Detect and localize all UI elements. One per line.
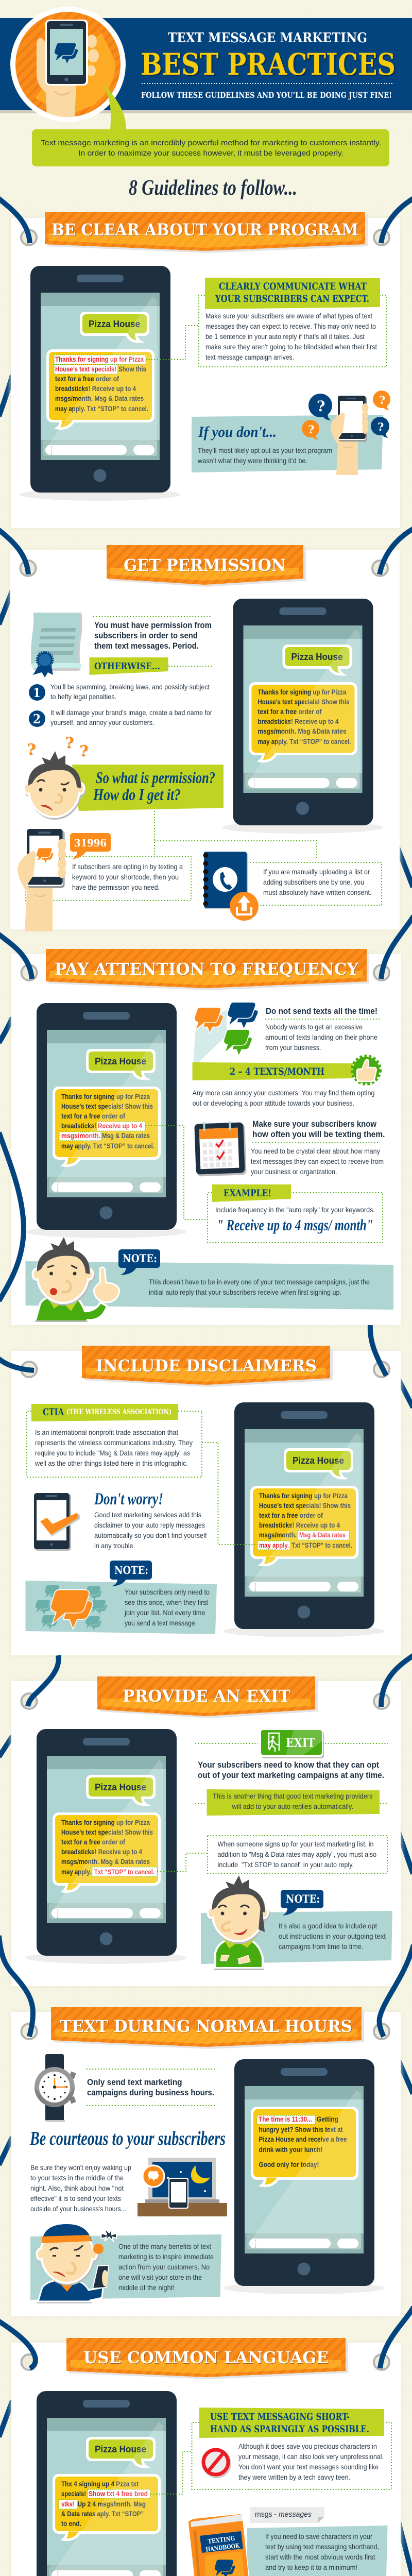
statement: opt out at any time: out of your text marketing campaigns at any time. (198, 1771, 384, 1780)
phone: pizza house message: msgs/month. Msg & Data rates (55, 395, 144, 402)
text: unprofessional (238, 2442, 384, 2481)
note panel: campaigns from time to time. (279, 1942, 364, 1951)
note panel: you send a text message. (125, 1619, 197, 1627)
phone: exit highlight: Txt “STOP” to cancel. (94, 1868, 154, 1876)
text: don't worry: Good text marketing services add this (94, 1511, 201, 1519)
phone: exit highlight: Thanks for signing up for Pizza (61, 1819, 150, 1826)
section 4: include disclaimers (0, 1325, 401, 1655)
phone: frequency highlight: Msg & Data rates (102, 1132, 150, 1140)
panel: save characters: If you need to save characters in your (265, 2532, 372, 2540)
label: otherwise (90, 657, 168, 675)
icon: texting handbook: HANDBOOK (205, 2542, 240, 2553)
banner: text during normal hours (51, 2007, 364, 2049)
text: don't worry: disclaimer to your auto reply messages (94, 1521, 205, 1529)
banner: pay attention to frequency (46, 949, 369, 990)
note panel: Your subscribers only need to (125, 1588, 210, 1596)
phone: frequency highlight: Receive up to 4 (98, 1122, 142, 1130)
text: manually uploading: must absolutely have written consent. (263, 888, 372, 896)
numbered point 1 (29, 683, 210, 701)
text: clearly communicate: text message campaign arrives. (205, 353, 294, 361)
phone: exit highlight: House’s text specials! Show this (61, 1828, 153, 1836)
text: unprofessional: Although it does save you precious characters in (238, 2442, 377, 2450)
text: clearly communicate: be 1 sentence in your auto reply if that’s all it takes. Just (205, 332, 365, 341)
phone: lunch message: hungry yet? Show this text at (259, 2126, 343, 2133)
text: don't worry: automatically so you don't find yourself (94, 1531, 207, 1539)
panel: save characters (247, 2526, 387, 2576)
phone: exit highlight (26, 1729, 186, 1964)
numbered point 2: yourself, and annoy your customers. (50, 718, 154, 726)
panel: inspire immediate action: middle of the night! (118, 2283, 175, 2292)
panel: if you don't: wasn’t what they were thinking it’d be. (197, 456, 307, 465)
box: when someone signs up: include "Txt STOP to cancel" in your auto reply. (217, 1860, 354, 1869)
phone: disclaimer highlight: msgs/month. (259, 1531, 297, 1539)
banner: text during normal hours: TEXT DURING NORMAL HOURS (60, 2016, 352, 2036)
banner: provide an exit (97, 1676, 318, 1718)
text: opting in (72, 862, 183, 891)
phone: pizza house message: text for a free order of (258, 708, 322, 716)
icon: hand with phone (18, 828, 66, 931)
text: ctia description: require you to include "Msg & Data rates may apply" as (35, 1449, 190, 1457)
phone: pizza house message (20, 266, 180, 501)
phone: frequency highlight: text for a free order of (61, 1112, 125, 1120)
icon: hand holding phone with question bubbles (302, 391, 390, 475)
phone: frequency highlight: breadsticks! (61, 1122, 96, 1130)
icon: texting handbook (188, 2514, 250, 2576)
box: example: Include frequency in the "auto reply" for your keywords. (215, 1206, 375, 1214)
panel: inspire immediate action: marketing is to inspire immediate (118, 2252, 214, 2261)
character: confused man: ? (27, 741, 36, 759)
box: when someone signs up (208, 1836, 387, 1873)
phone: shorthand message: Up 2 4 msgs/mnth. Msg (77, 2500, 146, 2508)
panel: if you don't (192, 415, 383, 472)
numbered point 1: 1 (33, 685, 41, 700)
box: ctia (31, 1404, 178, 1421)
statement: business hours: campaigns during business hours. (87, 2088, 214, 2097)
bar: 2-4 texts per month: 2 – 4 TEXTS/MONTH (230, 1066, 324, 1077)
banner: include disclaimers (82, 1346, 333, 1387)
label: otherwise: OTHERWISE... (94, 661, 160, 672)
note panel: see this once, when they first (125, 1598, 208, 1606)
phone: frequency highlight (26, 1003, 186, 1238)
text: ctia description: well as the other things listed here in this infographic. (35, 1459, 188, 1467)
banner: be clear about your program: BE CLEAR ABOUT YOUR PROGRAM (52, 220, 358, 240)
box: good providers add automatically (207, 1789, 380, 1816)
box: when someone signs up: addition to "Msg & Data rates may apply", you must also (217, 1850, 376, 1858)
phone: disclaimer highlight (224, 1402, 384, 1637)
section 1: be clear about your program (0, 198, 412, 528)
panel: so what is permission (72, 765, 224, 811)
box: good providers add automatically: This is another thing that good text marketing providers (213, 1792, 373, 1800)
text: make sure subscribers know (251, 1120, 385, 1176)
text: any more can annoy (193, 1089, 375, 1107)
phone: frequency highlight: msgs/month. (61, 1132, 100, 1140)
statement: opt out at any time (198, 1760, 384, 1780)
text: opting in: If subscribers are opting in by texting a (72, 862, 183, 871)
text: clearly communicate: make sure they aren’t going to be blindsided when their first (205, 343, 377, 351)
panel: save characters: start with the most obvious words first (265, 2553, 375, 2561)
panel: inspire immediate action: action from your customers. No (118, 2263, 210, 2271)
text: opting in: keyword to your shortcode, then you (72, 873, 179, 881)
statement: business hours (87, 2078, 214, 2097)
phone: frequency highlight: may apply. Txt “STOP” to cancel. (61, 1142, 154, 1150)
phone: pizza house message: Thanks for signing up for Pizza (258, 688, 347, 696)
text: make sure subscribers know: You need to be crystal clear about how many (251, 1147, 380, 1155)
intro callout (32, 81, 389, 166)
phone: disclaimer highlight: Msg & Data rates (299, 1531, 346, 1539)
phone: exit highlight: Pizza House (95, 1782, 146, 1792)
hero illustration: hand holding phone (10, 7, 126, 122)
phone: pizza house message: House’s text specials! Show this (258, 698, 349, 706)
text: don't worry (94, 1490, 207, 1550)
icon: hand holding phone with question bubbles: ? (377, 420, 384, 433)
icon: hand holding phone with question bubbles: ? (317, 398, 325, 415)
text: do not send all the time: from your business. (265, 1043, 321, 1052)
phone: exit highlight: text for a free order of (61, 1838, 125, 1846)
note panel: This doesn’t have to be in every one of your text message campaigns, just the (149, 1278, 370, 1286)
phone: disclaimer highlight: House’s text specials! Show this (259, 1502, 351, 1510)
banner: use common language (66, 2338, 348, 2379)
phone: disclaimer highlight: Pizza House (293, 1455, 344, 1466)
banner: get permission: GET PERMISSION (124, 555, 286, 575)
statement: you must have permission: subscribers in order to send (94, 631, 198, 640)
guidelines heading: 8 Guidelines to follow... (129, 176, 297, 200)
phone: disclaimer highlight: text for a free order of (259, 1512, 323, 1519)
statement: business hours: Only send text marketing (87, 2078, 182, 2087)
text: waking up: outside of your business's hours... (30, 2205, 126, 2213)
phone: pizza house message: breadsticks! Receive up to 4 (55, 385, 136, 393)
numbered point 2: It will damage your brand’s image, create a bad name for (50, 708, 212, 717)
bubble: note (118, 1249, 160, 1275)
phone: disclaimer highlight: breadsticks! Receive up to 4 (259, 1521, 340, 1529)
phone: pizza house message: breadsticks! Receive up to 4 (258, 718, 339, 725)
heading box: shorthand: USE TEXT MESSAGING SHORT- (210, 2411, 350, 2422)
intro callout: In order to maximize your success however, it must be leveraged properly. (78, 149, 344, 158)
text: ctia description (35, 1428, 193, 1467)
text: do not send all the time: Do not send texts all the time! (266, 1007, 377, 1016)
note panel (201, 1890, 392, 1964)
title line 1: TEXT MESSAGE MARKETING (168, 30, 367, 46)
box: example: EXAMPLE! (224, 1188, 271, 1199)
icon: phone with check mark (34, 1493, 80, 1551)
section 7: use common language (0, 2307, 412, 2576)
phone: frequency highlight: Pizza House (95, 1056, 146, 1066)
text: manually uploading (263, 868, 372, 896)
phone: pizza house message (222, 599, 383, 834)
banner: use common language: USE COMMON LANGUAGE (83, 2348, 329, 2367)
icon: thumbs up badge (353, 1057, 380, 1083)
phone: shorthand message: specials! (61, 2490, 86, 2498)
statement: you must have permission: them text messages. Period. (94, 641, 199, 651)
icon: night window with phone (138, 2158, 227, 2216)
banner: get permission (107, 545, 306, 587)
text: ctia description: represents the wireless communications industry. They (35, 1438, 193, 1447)
note panel: NOTE: (114, 1564, 148, 1577)
phone: shorthand message: Pizza House (95, 2444, 146, 2454)
section 6: text during normal hours (0, 1936, 412, 2316)
phone: exit highlight: msgs/month. Msg & Data rates (61, 1858, 150, 1866)
card: msgs (250, 2507, 324, 2523)
note panel: initial auto reply that your subscribers receive when first signing up. (149, 1288, 341, 1296)
text: clearly communicate: messages they can expect to receive. This may only need to (205, 322, 376, 330)
box: when someone signs up: When someone signs up for your text marketing list, in (217, 1840, 374, 1848)
phone: lunch message: drink with your lunch! (259, 2146, 322, 2154)
note panel (26, 1261, 393, 1310)
panel: so what is permission: How do I get it? (93, 785, 181, 804)
box: good providers add automatically: will add to your auto replies automatically. (232, 1802, 353, 1810)
note panel: It’s also a good idea to include opt (279, 1922, 377, 1930)
bubble: note: NOTE: (123, 1252, 157, 1265)
text: do not send all the time: amount of texts landing on their phone (265, 1033, 377, 1041)
panel: if you don't: They’ll most likely opt out as your text program (198, 446, 332, 454)
heading box: shorthand (199, 2408, 384, 2438)
intro callout: Text message marketing is an incredibly powerful method for marketing to customers instantly. (41, 139, 381, 147)
icon: wristwatch (35, 2054, 76, 2122)
statement: you must have permission (94, 621, 212, 651)
phone: exit highlight: may apply. (61, 1868, 91, 1876)
phone: shorthand message: & Data rates aply. Txt “STOP” (61, 2510, 144, 2518)
banner: pay attention to frequency: PAY ATTENTION TO FREQUENCY (55, 959, 359, 979)
text: any more can annoy: out or developing a poor attitude towards your business. (193, 1099, 354, 1107)
icon: certificate (31, 613, 82, 677)
bar: 2-4 texts per month (193, 1062, 353, 1080)
text: make sure subscribers know: Make sure your subscribers know (252, 1120, 376, 1129)
box: ctia: (THE WIRELESS ASSOCIATION) (66, 1408, 171, 1416)
note panel: NOTE: (286, 1892, 320, 1905)
text: waking up: Be sure they won't enjoy waking up (30, 2163, 131, 2172)
phone: lunch message: Pizza House and receive a free (259, 2136, 347, 2143)
numbered point 2: 2 (33, 711, 41, 726)
text: any more can annoy: Any more can annoy your customers. You may find them opting (193, 1089, 375, 1097)
text: clearly communicate (205, 312, 377, 361)
text: unprofessional: your message, it can also look very unprofessional. (238, 2452, 384, 2461)
text: unprofessional: they were written by a tech savvy teen. (238, 2473, 350, 2481)
icon: calendar (194, 1121, 247, 1177)
phone: pizza house message: text for a free order of (55, 375, 119, 383)
box: example (212, 1184, 375, 1234)
numbered point 1: to hefty legal penalties. (50, 692, 116, 701)
icon: address book with upload (203, 852, 259, 921)
note panel: out instructions in your outgoing text (279, 1932, 386, 1940)
text: do not send all the time: Nobody wants to get an excessive (265, 1023, 363, 1031)
header (0, 7, 412, 122)
icon: no sign (202, 2449, 231, 2478)
icon: hand holding phone with question bubbles: ? (379, 394, 385, 406)
heading box: clearly communicate: YOUR SUBSCRIBERS CAN EXPECT. (215, 293, 369, 304)
icon: hand holding phone with question bubbles: ? (308, 423, 314, 436)
text: clearly communicate: Make sure your subscribers are aware of what types of text (205, 312, 372, 320)
text: waking up: to your texts in the middle of the (30, 2174, 124, 2182)
phone: disclaimer highlight: may apply. (259, 1541, 289, 1549)
phone: shorthand message: Thx 4 signing up 4 Pzza txt (61, 2480, 139, 2488)
numbered point 2 (29, 708, 212, 727)
phone: pizza house message: may apply. Txt “STOP” to cancel. (55, 405, 148, 413)
phone: pizza house message: House’s text specials! (55, 365, 116, 373)
phone: pizza house message: msgs/month. Msg &Data rates (258, 727, 346, 735)
panel: inspire immediate action (30, 2234, 221, 2300)
phone: exit highlight: breadsticks! Receive up to 4 (61, 1848, 142, 1856)
panel: inspire immediate action: one will visit your store in the (118, 2273, 202, 2281)
section 3: pay attention to frequency (0, 916, 412, 1325)
text: make sure subscribers know: text messages they can expect to receive from (251, 1157, 384, 1165)
banner: be clear about your program (45, 212, 368, 253)
text: waking up: effective" it is to send your texts (30, 2194, 121, 2202)
icon: texting handbook: TEXTING (208, 2535, 235, 2545)
text: manually uploading: adding subscribers one by one, you (263, 878, 364, 886)
text: manually uploading: If you are manually uploading a list or (263, 868, 370, 876)
phone: lunch message: The time is 11:30... (259, 2115, 312, 2123)
phone: lunch message: Good only for today! (259, 2161, 319, 2168)
statement: opt out at any time: Your subscribers need to know that they can opt (198, 1760, 379, 1770)
panel: if you don't: If you don't... (198, 423, 277, 440)
heading: be courteous: Be courteous to your subscribers (29, 2128, 226, 2149)
note panel: join your list. Not every time (124, 1608, 205, 1617)
banner: include disclaimers: INCLUDE DISCLAIMERS (96, 1356, 317, 1376)
phone: pizza house message: Thanks for signing up for Pizza (55, 355, 144, 363)
text: waking up (30, 2163, 131, 2213)
banner: provide an exit: PROVIDE AN EXIT (123, 1686, 290, 1706)
text: waking up: night. Also, think about how "not (30, 2184, 124, 2192)
phone: pizza house message: Pizza House (291, 652, 343, 662)
panel: save characters: and try to keep it to a minimum! (265, 2563, 357, 2571)
text: don't worry: in any trouble. (94, 1541, 135, 1550)
panel: inspire immediate action: One of the many benefits of text (118, 2242, 211, 2250)
phone: pizza house message: Show this (118, 365, 146, 373)
box: ctia: CTIA (43, 1406, 64, 1418)
bubble: shortcode 31996: 31996 (74, 837, 107, 849)
character: confused man: ? (65, 734, 74, 752)
phone: pizza house message: may apply. Txt “STOP” to cancel. (258, 738, 351, 745)
text: do not send all the time (265, 1007, 380, 1052)
panel: save characters: text by using text messaging shorthand, (265, 2543, 379, 2551)
statement: you must have permission: You must have permission from (94, 621, 212, 630)
icon: exit sign: EXIT (286, 1735, 315, 1750)
character: man with crossed arms (208, 1875, 269, 1970)
header band (0, 18, 412, 110)
text: make sure subscribers know: how often you will be texting them. (252, 1130, 385, 1139)
numbered point 1: You’ll be spamming, breaking laws, and possibly subject (50, 683, 210, 691)
text: don't worry: Don't worry! (94, 1490, 163, 1509)
text: ctia description: Is an international nonprofit trade association that (35, 1428, 178, 1436)
phone: disclaimer highlight: Txt “STOP” to cancel. (291, 1541, 352, 1549)
character: confused man: ? (79, 742, 89, 760)
phone: shorthand message: Show txt 4 free bred (89, 2490, 148, 2498)
phone: lunch message (224, 2059, 384, 2294)
phone: frequency highlight: Thanks for signing up for Pizza (61, 1093, 150, 1100)
phone: shorthand message: to end. (61, 2520, 81, 2528)
character: annoyed man woken by a text (37, 2224, 116, 2303)
heading box: clearly communicate: CLEARLY COMMUNICATE WHAT (219, 281, 367, 292)
phone: disclaimer highlight: Thanks for signing up for Pizza (259, 1492, 348, 1500)
text: unprofessional: You don’t want your text messages sounding like (238, 2463, 379, 2471)
phone: shorthand message (26, 2391, 186, 2576)
text: make sure subscribers know: your business or organization. (251, 1167, 337, 1176)
note panel (26, 1561, 217, 1634)
heading box: clearly communicate (205, 278, 380, 309)
bubble: shortcode 31996 (70, 833, 111, 859)
phone: lunch message: Getting (317, 2115, 338, 2123)
section 2: get permission (0, 529, 412, 931)
section 5: provide an exit (11, 1655, 412, 1986)
card: msgs: msgs - messages (255, 2510, 312, 2519)
icon: chat bubbles (193, 1002, 259, 1067)
phone: frequency highlight: House’s text specials! Show this (61, 1103, 153, 1110)
character: man pointing up (33, 1237, 119, 1322)
text: opting in: have the permission you need. (72, 883, 160, 891)
panel: so what is permission: So what is permission? (96, 768, 215, 787)
character: confused man (24, 734, 89, 819)
icon: exit sign (261, 1730, 324, 1758)
heading box: shorthand: HAND AS SPARINGLY AS POSSIBLE. (210, 2424, 369, 2435)
phone: shorthand message: stks! (61, 2500, 74, 2508)
phone: pizza house message: Pizza House (89, 319, 140, 329)
